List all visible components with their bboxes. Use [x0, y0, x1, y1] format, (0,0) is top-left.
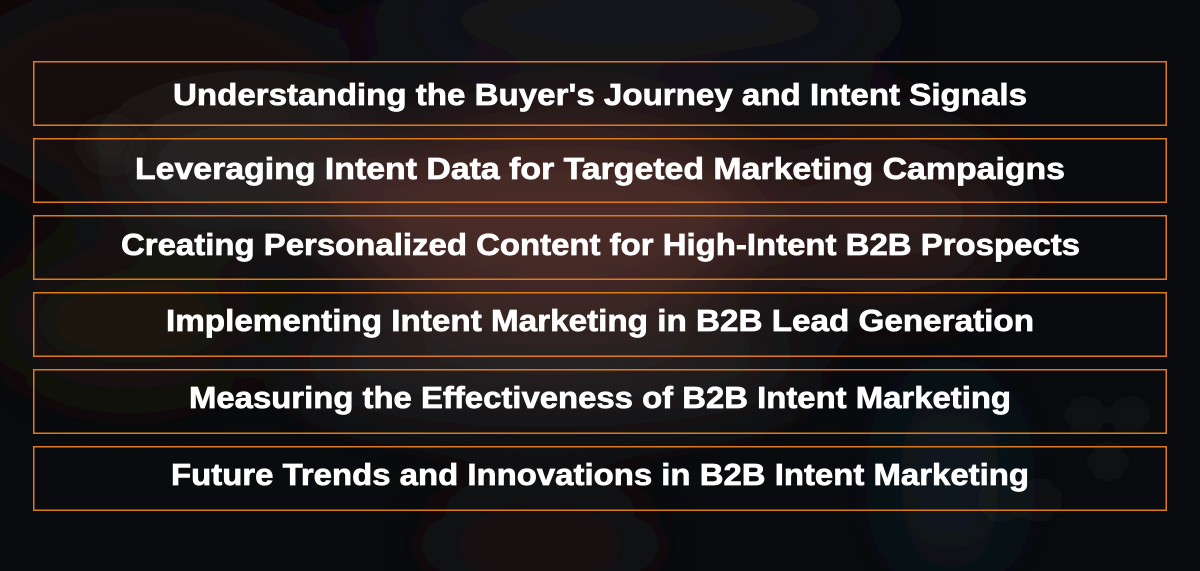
item 4: lead generation: [34, 293, 1166, 356]
item 1: buyer's journey: Understanding the Buyer's Journey and Intent Signals: [173, 77, 1027, 112]
item 3: personalized content: [34, 216, 1166, 279]
item 5: measuring effectiveness: Measuring the Effectiveness of B2B Intent Marketing: [189, 380, 1011, 415]
item 2: targeted campaigns: [34, 139, 1166, 202]
item 5: measuring effectiveness: [34, 370, 1166, 433]
item 6: future trends: [34, 447, 1166, 510]
item 3: personalized content: Creating Personalized Content for High-Intent B2B Prospects: [121, 227, 1080, 262]
item 2: targeted campaigns: Leveraging Intent Data for Targeted Marketing Campaigns: [135, 151, 1065, 186]
item 1: buyer's journey: [34, 62, 1166, 125]
item 6: future trends: Future Trends and Innovations in B2B Intent Marketing: [171, 457, 1029, 492]
item 4: lead generation: Implementing Intent Marketing in B2B Lead Generation: [166, 303, 1034, 338]
